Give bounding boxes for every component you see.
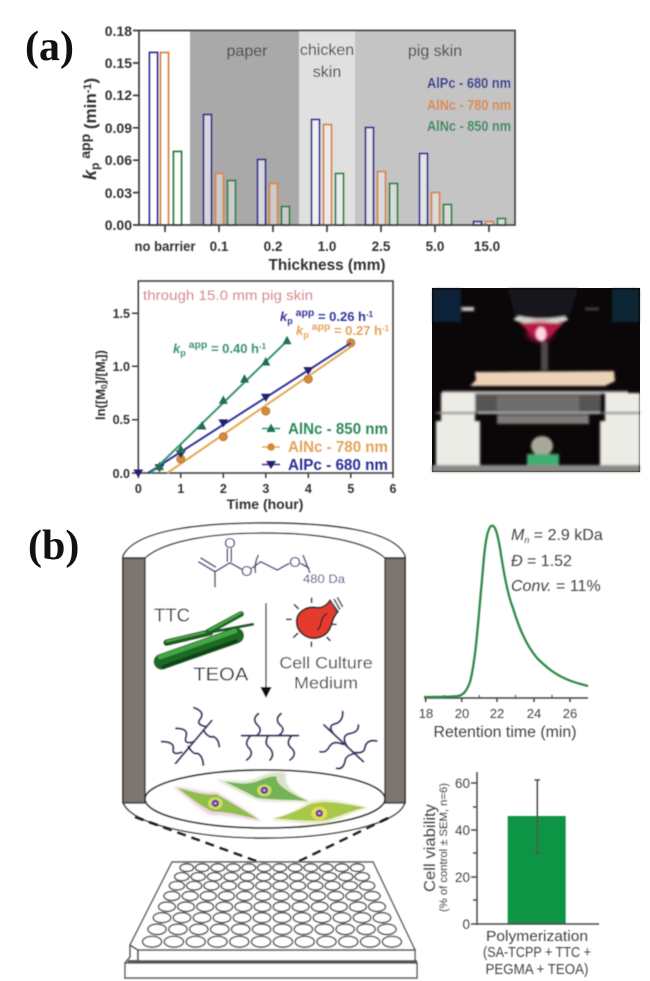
monomer structure: O xyxy=(241,563,253,580)
plot frame and ticks xyxy=(132,281,393,478)
polymer properties: M xyxy=(511,527,525,544)
x axis title: Thickness (mm) xyxy=(268,257,386,274)
green bar xyxy=(508,816,566,924)
contents in zoomed coordinates xyxy=(154,597,377,824)
label: TTC: TTC xyxy=(154,604,190,625)
x axis labels xyxy=(483,929,591,978)
axes xyxy=(471,772,599,925)
y axis title: Cell viability xyxy=(422,804,439,892)
plot legend: AlNc - 850 nm xyxy=(288,421,388,438)
x axis tick labels: 0.2 xyxy=(264,239,282,254)
rate annotation: 850 nm: -1 xyxy=(259,342,267,351)
y axis tick labels: 0.09 xyxy=(105,120,132,136)
y tick labels: 1.0 xyxy=(113,360,130,374)
x axis tick labels: 5.0 xyxy=(426,239,444,254)
label: TEOA: TEOA xyxy=(193,664,249,685)
rate annotation: 680 nm: p xyxy=(287,316,293,326)
x tick labels: 5 xyxy=(347,482,354,496)
rate annotation: 680 nm: app xyxy=(293,307,314,319)
rate annotation: 780 nm: app xyxy=(309,321,330,333)
monomer structure: 480 Da xyxy=(303,572,345,586)
y axis tick labels: 0.00 xyxy=(105,217,132,233)
y axis tick labels: 0.12 xyxy=(105,87,132,103)
legend: AlNc - 780 nm xyxy=(427,98,511,114)
zone labels: pig skin xyxy=(408,43,462,60)
tick labels xyxy=(419,706,577,721)
y axis subtitle: (% of control ± SEM, n=6) xyxy=(438,783,450,912)
y tick labels: 40 xyxy=(455,823,470,838)
y axis title: ]/[M xyxy=(93,361,108,384)
rate annotation: 780 nm: k xyxy=(296,323,304,338)
plot legend: AlPc - 680 nm xyxy=(288,457,388,474)
illustration: 96-well plate xyxy=(125,862,417,978)
x tick labels: 0 xyxy=(135,482,142,496)
series: AlNc 850 nm xyxy=(151,336,292,473)
dashed zoom lines xyxy=(135,817,388,867)
y axis title: ]) xyxy=(93,350,108,359)
y axis title: -1 xyxy=(82,83,94,93)
y axis title: app xyxy=(77,134,93,163)
zone labels xyxy=(227,42,462,81)
photo: experimental setup xyxy=(432,288,640,472)
cells on well bottom xyxy=(173,772,368,824)
panel: retention time trace xyxy=(419,526,603,741)
x axis tick labels: 1.0 xyxy=(318,239,336,254)
x tick labels: 3 xyxy=(262,482,269,496)
rate annotation: 680 nm: = 0.26 h xyxy=(314,309,366,324)
zone labels: skin xyxy=(313,64,341,81)
y axis title: (min xyxy=(81,93,100,134)
rate annotation: 850 nm: k xyxy=(173,341,181,356)
label: cell culture medium: Cell Culture xyxy=(279,654,373,673)
rate annotation: 850 nm: app xyxy=(186,339,207,351)
y axis tick labels: 0.03 xyxy=(105,185,132,201)
y axis title: ) xyxy=(81,78,100,83)
x axis tick labels xyxy=(134,239,500,254)
note: through 15.0 mm pig skin xyxy=(143,287,313,303)
polymer structures xyxy=(162,708,377,769)
polymer properties: n xyxy=(524,535,529,545)
y tick labels: 0.0 xyxy=(113,467,130,481)
axes and frame xyxy=(133,30,515,232)
x axis labels: PEGMA + TEOA) xyxy=(486,962,588,978)
legend: AlPc - 680 nm xyxy=(427,76,511,92)
polymer properties: Đ = 1.52 xyxy=(511,553,572,570)
y axis title: 0 xyxy=(100,384,109,389)
rate annotation: 780 nm: = 0.27 h xyxy=(330,323,382,338)
bars: AlNc 780 nm xyxy=(160,52,494,225)
y axis tick labels: 0.06 xyxy=(105,152,132,168)
x tick labels xyxy=(135,482,397,496)
plot legend xyxy=(262,421,388,474)
nanotube cluster xyxy=(160,613,253,667)
monomer structure: O xyxy=(289,554,301,571)
tick labels: 24 xyxy=(527,706,541,721)
x tick labels: 6 xyxy=(390,482,397,496)
y axis title: k xyxy=(80,169,100,180)
panel: rate constant bar chart xyxy=(77,23,515,274)
y tick labels: 1.5 xyxy=(113,307,130,321)
panel: cell viability bar chart xyxy=(422,772,599,978)
rate annotation: 780 nm: p xyxy=(303,330,309,340)
x axis tick labels: 2.5 xyxy=(372,239,391,254)
label: cell culture medium xyxy=(279,654,373,693)
y tick labels xyxy=(455,776,470,932)
axis xyxy=(424,695,588,702)
series: AlNc 780 nm xyxy=(167,339,355,473)
y axis title: t xyxy=(100,358,109,361)
polymer properties: Conv. = 11% xyxy=(511,578,601,595)
heading: panel b label: (b) xyxy=(28,523,79,569)
monomer structure: O xyxy=(224,535,236,552)
y tick labels: 0.5 xyxy=(113,413,130,427)
rate annotation: 680 nm: -1 xyxy=(366,310,374,319)
y axis tick labels: 0.15 xyxy=(105,55,132,71)
polymer properties xyxy=(511,527,603,595)
rate annotation: 850 nm: = 0.40 h xyxy=(207,341,259,356)
trace curve xyxy=(424,526,588,697)
plot legend: AlNc - 780 nm xyxy=(288,439,388,456)
y tick labels: 20 xyxy=(455,870,470,885)
rate annotation: 780 nm: -1 xyxy=(382,324,390,333)
y axis title: ln([M xyxy=(93,389,108,420)
barrier background zones xyxy=(190,31,515,225)
polymer properties: = 2.9 kDa xyxy=(529,527,603,544)
error bar xyxy=(534,780,540,853)
panel: kinetics line plot xyxy=(93,281,397,512)
y tick labels: 0 xyxy=(462,917,470,932)
rate annotation: 680 nm: k xyxy=(280,309,288,324)
tick labels: 18 xyxy=(419,706,433,721)
plate outline xyxy=(125,862,417,978)
label: cell culture medium: Medium xyxy=(294,674,358,693)
illustration: well with reaction xyxy=(123,523,405,838)
legend: AlNc - 850 nm xyxy=(427,119,511,135)
zone labels: paper xyxy=(227,43,268,60)
y axis tick labels xyxy=(105,23,132,233)
icon: red light bulb xyxy=(286,597,343,647)
x axis tick labels: 0.1 xyxy=(210,239,229,254)
tick labels: 20 xyxy=(455,706,469,721)
tick labels: 26 xyxy=(563,706,577,721)
series: AlPc 680 nm xyxy=(133,343,351,478)
x axis tick labels: 15.0 xyxy=(474,239,500,254)
wells xyxy=(143,864,401,947)
heading: panel a label: (a) xyxy=(25,24,74,70)
y axis title: p xyxy=(88,163,102,170)
x tick labels: 4 xyxy=(305,482,312,496)
y tick labels: 60 xyxy=(455,776,470,791)
axis title: Retention time (min) xyxy=(434,724,576,741)
x axis labels: Polymerization xyxy=(486,929,588,945)
x axis title: Time (hour) xyxy=(227,496,303,512)
monomer structure xyxy=(198,535,345,587)
x tick labels: 2 xyxy=(220,482,227,496)
vessel body xyxy=(123,523,405,838)
zone labels: chicken xyxy=(300,42,354,59)
bars: AlNc 850 nm xyxy=(174,152,506,225)
x tick labels: 1 xyxy=(177,482,184,496)
tick labels: 22 xyxy=(490,706,504,721)
bars: AlPc 680 nm xyxy=(150,52,482,225)
reaction arrow xyxy=(260,603,272,698)
y axis tick labels: 0.18 xyxy=(105,23,132,39)
y tick labels xyxy=(113,307,130,481)
x axis labels: (SA-TCPP + TTC + xyxy=(483,945,591,961)
rate annotation: 850 nm: p xyxy=(180,348,186,358)
legend xyxy=(427,76,511,135)
x axis tick labels: no barrier xyxy=(134,239,196,254)
